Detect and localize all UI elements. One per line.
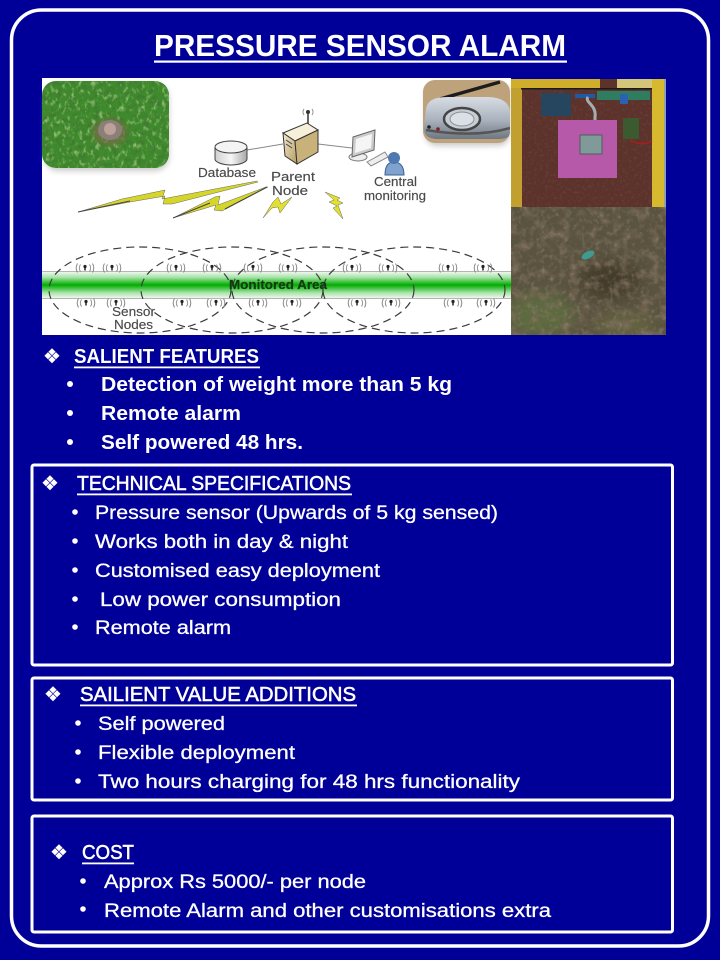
photo: buried sensor in grass xyxy=(42,81,169,171)
value additions list: Self powered xyxy=(98,713,225,735)
panel: cost xyxy=(32,816,672,932)
value additions list: Two hours charging for 48 hrs functionality xyxy=(98,771,520,793)
specification list: Remote alarm xyxy=(95,617,231,639)
sensor coverage ellipses xyxy=(49,247,505,333)
feature list: Self powered 48 hrs. xyxy=(101,431,303,454)
feature list xyxy=(67,373,452,454)
image panel: sensor network diagram: Node xyxy=(272,184,308,198)
heading: value additions: SAILIENT VALUE ADDITIONS xyxy=(80,684,356,706)
label: central monitoring: Central xyxy=(374,175,417,189)
feature list: Detection of weight more than 5 kg xyxy=(101,373,452,396)
photo: wireless alarm device xyxy=(423,80,510,146)
heading: technical specifications: ❖ xyxy=(41,471,59,495)
label: database: Database xyxy=(198,166,256,180)
specification list xyxy=(72,502,498,639)
image panel: sensor network diagram: Nodes xyxy=(114,318,153,332)
heading: cost: ❖ xyxy=(50,840,68,864)
heading: value additions: ❖ xyxy=(44,682,62,706)
heading: salient features: ❖ xyxy=(43,344,61,368)
panel: technical specifications xyxy=(32,465,672,665)
icon: central monitoring xyxy=(349,130,404,175)
cost list: Remote Alarm and other customisations extra xyxy=(104,900,551,922)
image panel: sensor network diagram: monitoring xyxy=(364,189,426,203)
title: PRESSURE SENSOR ALARM xyxy=(154,29,566,63)
heading: salient features: SALIENT FEATURES xyxy=(74,345,259,368)
heading: cost xyxy=(50,840,134,864)
monitored area band xyxy=(42,272,511,298)
specification list: Customised easy deployment xyxy=(95,560,381,582)
heading: technical specifications: TECHNICAL SPECIFICATIONS xyxy=(77,473,351,495)
cost list xyxy=(80,871,551,922)
feature list: Remote alarm xyxy=(101,402,241,425)
section: salient features xyxy=(43,344,452,454)
cost list: Approx Rs 5000/- per node xyxy=(104,871,366,893)
heading: cost: COST xyxy=(82,842,134,864)
label: parent node: Parent xyxy=(271,170,316,184)
specification list: Works both in day & night xyxy=(95,531,349,553)
specification list: Low power consumption xyxy=(100,589,341,611)
photo: sensor board xyxy=(511,79,666,207)
image panel: sensor network diagram xyxy=(42,78,511,335)
wireless link lightning bolts xyxy=(78,181,343,219)
photo: deployed sensor on ground xyxy=(505,207,666,337)
sensor nodes xyxy=(76,264,495,308)
value additions list xyxy=(75,713,520,793)
icon: parent node server xyxy=(283,109,352,164)
label: monitored area: Monitored Area xyxy=(229,278,328,292)
specification list: Pressure sensor (Upwards of 5 kg sensed) xyxy=(95,502,498,524)
value additions list: Flexible deployment xyxy=(98,742,296,764)
label: sensor nodes: Sensor xyxy=(112,305,155,319)
icon: database xyxy=(215,141,283,165)
panel: salient value additions xyxy=(32,678,672,800)
